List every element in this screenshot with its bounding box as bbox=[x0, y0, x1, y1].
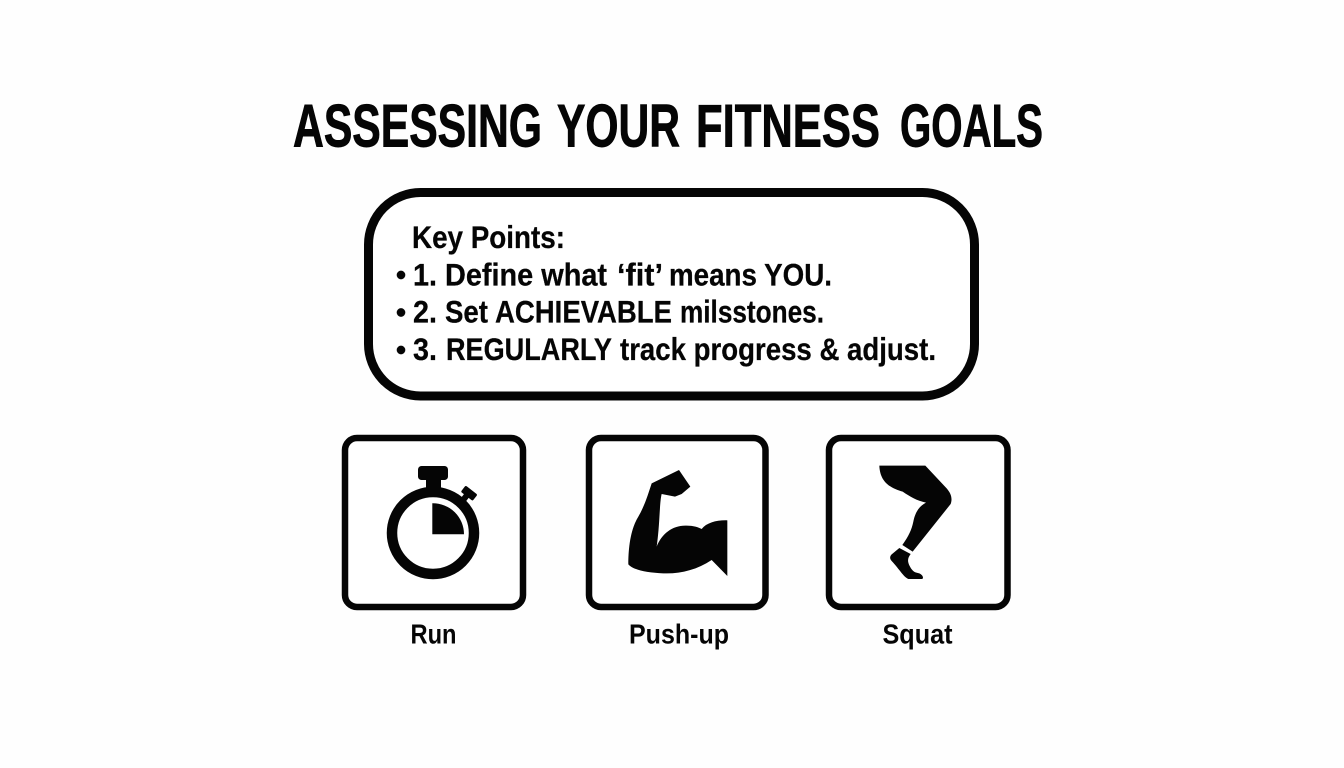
panel: squat icon card bbox=[829, 438, 1008, 607]
label: squat: Squat bbox=[882, 618, 952, 649]
panel: push-up icon card bbox=[589, 438, 766, 607]
panel: key points bbox=[368, 192, 974, 396]
list item 1: Define what bbox=[445, 256, 607, 292]
heading: key points: Key Points: bbox=[412, 219, 565, 255]
title: YOUR bbox=[557, 92, 680, 160]
label: push-up: Push-up bbox=[629, 618, 729, 649]
icon: stopwatch bbox=[392, 466, 477, 574]
title: GOALS bbox=[900, 92, 1043, 160]
list item 3: 3. bbox=[413, 331, 437, 367]
list item 2: Set bbox=[445, 294, 488, 330]
list item 3: REGULARLY bbox=[446, 331, 612, 367]
icon: flexed arm bbox=[628, 470, 727, 576]
list item 2: ACHIEVABLE bbox=[495, 294, 672, 330]
list item 1 bbox=[397, 256, 832, 292]
list item 3 bbox=[397, 331, 936, 367]
panel: run icon card bbox=[345, 438, 523, 607]
label: run: Run bbox=[410, 618, 456, 649]
list item 3: track progress & adjust. bbox=[620, 331, 936, 367]
title: FITNESS bbox=[696, 92, 880, 160]
list item 1: ‘fit’ bbox=[617, 256, 663, 292]
list item 2: 2. bbox=[413, 294, 437, 330]
icon: bent leg bbox=[879, 466, 952, 579]
title: ASSESSING bbox=[293, 92, 542, 160]
list item 1: 1. bbox=[413, 256, 437, 292]
title bbox=[293, 92, 1043, 160]
list item 2: milsstones. bbox=[680, 294, 824, 330]
list item 1: means YOU. bbox=[669, 256, 832, 292]
list item 2 bbox=[397, 294, 824, 330]
